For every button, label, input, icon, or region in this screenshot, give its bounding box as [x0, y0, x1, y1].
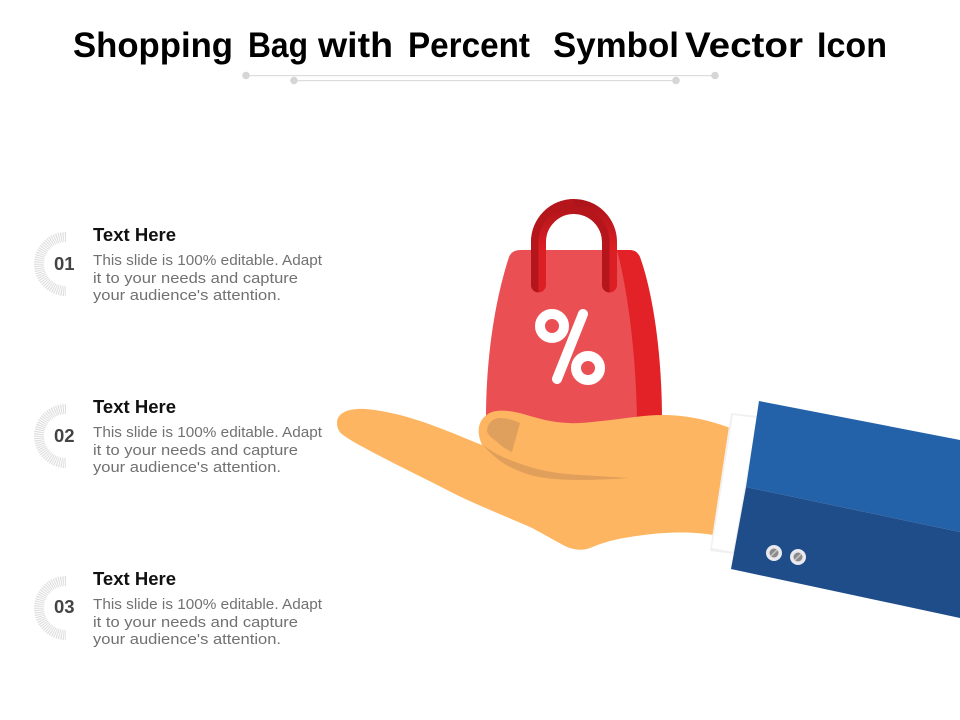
- title: Vector: [685, 26, 803, 65]
- list item 01: [39, 225, 322, 304]
- thumb crease: [483, 445, 630, 480]
- list item 01: 01: [54, 253, 75, 274]
- list item 03: This slide is 100% editable. Adapt: [93, 597, 322, 613]
- list item 02: 02: [54, 425, 75, 446]
- list item 01: This slide is 100% editable. Adapt: [93, 253, 322, 269]
- list item 01: Text Here: [93, 225, 176, 245]
- list item 02: it to your needs and capture: [93, 443, 298, 459]
- title: [73, 26, 887, 65]
- list item 02: [39, 397, 322, 476]
- list item 03: your audience's attention.: [93, 632, 281, 648]
- list item 03: [39, 569, 322, 648]
- hand shape: [337, 409, 730, 550]
- title: Icon: [817, 26, 887, 65]
- icon: shirt cuff: [710, 413, 758, 554]
- icon: open hand: [337, 409, 730, 550]
- title: Percent: [408, 26, 530, 65]
- title decoration: [242, 72, 719, 84]
- sleeve buttons: [766, 545, 806, 565]
- sleeve upper panel: [746, 401, 960, 532]
- thumbnail: [487, 418, 520, 452]
- title: Shopping: [73, 26, 233, 65]
- list item 02: your audience's attention.: [93, 460, 281, 476]
- list item 02: Text Here: [93, 397, 176, 417]
- title: Symbol: [553, 26, 679, 65]
- icon: suit sleeve: [731, 401, 960, 618]
- title: Bag: [248, 26, 308, 65]
- percent symbol: [540, 314, 600, 380]
- list item 01: it to your needs and capture: [93, 271, 298, 287]
- sleeve lower panel: [731, 487, 960, 618]
- title: with: [317, 26, 393, 65]
- list item 02: This slide is 100% editable. Adapt: [93, 425, 322, 441]
- bag handle: [531, 199, 610, 292]
- list item 03: Text Here: [93, 569, 176, 589]
- icon: shopping bag with percent symbol: [486, 199, 662, 430]
- list item 03: 03: [54, 596, 75, 617]
- list item 03: it to your needs and capture: [93, 615, 298, 631]
- bag side panel: [610, 250, 662, 430]
- list item 01: your audience's attention.: [93, 288, 281, 304]
- bag front panel: [486, 250, 637, 430]
